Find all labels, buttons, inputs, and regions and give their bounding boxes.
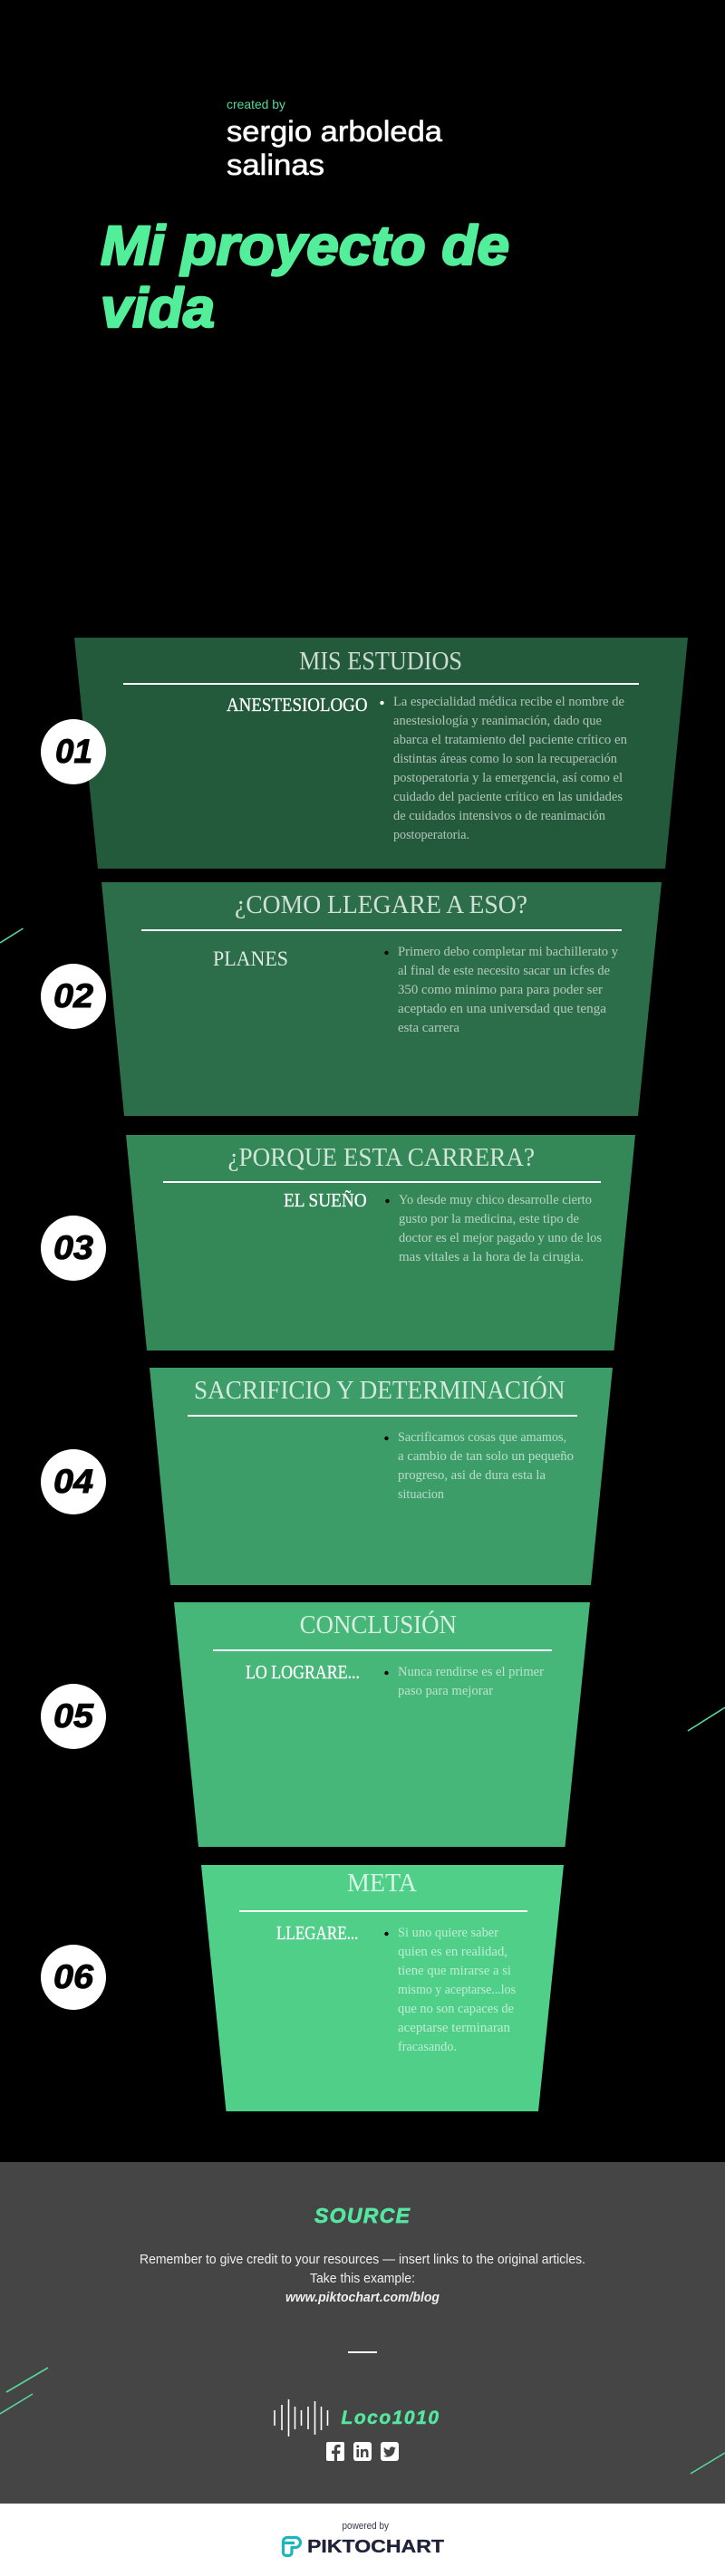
bullet (384, 1932, 389, 1936)
heading: conclusion: CONCLUSIÓN (300, 1611, 457, 1639)
number badge 05: 05 (53, 1697, 95, 1735)
body text: La especialidad médica recibe el nombre de (393, 695, 624, 709)
header: author credit: salinas (227, 149, 324, 181)
body text (399, 1193, 602, 1264)
title (101, 215, 509, 339)
number badge 04: 04 (53, 1463, 93, 1500)
powered by label: powered by (343, 2521, 389, 2532)
number badge 04 (41, 1449, 106, 1514)
subheading: planes: PLANES (213, 947, 288, 970)
heading: sacrificio y determinacion: SACRIFICIO Y DETERMINACIÓN (194, 1377, 566, 1405)
body text: mas vitales a la hora de la cirugia. (399, 1250, 584, 1264)
source text (140, 2252, 585, 2305)
heading: meta: META (347, 1870, 418, 1898)
body text: Si uno quiere saber (398, 1926, 498, 1940)
subheading: el sueno: EL SUEÑO (284, 1189, 367, 1211)
number badge 06 (41, 1945, 106, 2010)
number badge 05 (41, 1684, 106, 1749)
icon: facebook (326, 2442, 344, 2461)
body text: fracasando. (398, 2040, 457, 2054)
bullet (384, 1671, 389, 1675)
subheading: anestesiologo: ANESTESIOLOGO (227, 694, 368, 716)
heading: porque esta carrera: ¿PORQUE ESTA CARRERA? (228, 1144, 535, 1172)
number badge 06: 06 (53, 1958, 93, 1995)
number badge 02: 02 (53, 977, 93, 1014)
body text (398, 1665, 544, 1698)
number badge 01 (41, 719, 106, 784)
brand name: Loco1010 (341, 2408, 439, 2428)
heading: como llegare a eso: ¿COMO LLEGARE A ESO? (235, 891, 527, 919)
body text: Yo desde muy chico desarrolle cierto (399, 1193, 592, 1207)
body text: aceptado en una universdad que tenga (398, 1002, 607, 1016)
body text: a cambio de tan solo un pequeño (398, 1449, 574, 1464)
body text: postoperatoria. (393, 828, 469, 842)
decorative accent line: upper left (0, 928, 24, 943)
body text: Nunca rendirse es el primer (398, 1665, 544, 1679)
body text (393, 695, 628, 842)
bullet (384, 951, 389, 955)
panel: como llegare a eso (102, 882, 662, 1116)
source text: www.piktochart.com/blog (285, 2290, 440, 2305)
body text (398, 1926, 516, 2054)
number badge 01: 01 (55, 733, 92, 770)
decorative accent line: right (688, 1707, 725, 1731)
body text: distintas áreas como lo son la recuperación (393, 752, 618, 766)
icon: linkedin (353, 2442, 372, 2461)
body text (398, 1430, 574, 1502)
bullet (380, 701, 384, 705)
body text: tiene que mirarse a si (398, 1964, 511, 1978)
body text: Sacrificamos cosas que amamos, (398, 1430, 566, 1445)
source text: Take this example: (310, 2271, 415, 2286)
header: author credit (227, 97, 442, 181)
heading: source: SOURCE (314, 2204, 411, 2227)
source text: Remember to give credit to your resources — insert links to the original articles. (140, 2252, 585, 2267)
number badge 02 (41, 964, 106, 1029)
panel: source footer (0, 2162, 725, 2504)
icon: piktochart logo (283, 2538, 301, 2556)
body text: de cuidados intensivos o de reanimación (393, 809, 606, 823)
header: author credit: sergio arboleda (227, 115, 442, 148)
body text: quien es en realidad, (398, 1945, 508, 1959)
number badge 03 (41, 1216, 106, 1281)
panel: mis estudios (74, 638, 688, 869)
body text: situacion (398, 1487, 445, 1502)
body text: paso para mejorar (398, 1684, 493, 1698)
icon: sound wave logo (275, 2399, 328, 2437)
body text: 350 como minimo para para poder ser (398, 983, 603, 997)
body text: progreso, asi de dura esta la (398, 1468, 546, 1483)
body text: Primero debo completar mi bachillerato y (398, 945, 619, 959)
bullet (385, 1199, 390, 1203)
number badge 03: 03 (53, 1229, 93, 1266)
panel: porque esta carrera (126, 1135, 635, 1350)
heading: mis estudios: MIS ESTUDIOS (299, 648, 462, 676)
body text: gusto por la medicina, este tipo de (399, 1212, 579, 1226)
piktochart wordmark: PIKTOCHART (307, 2537, 444, 2557)
body text: al final de este necesito sacar un icfes de (398, 964, 610, 978)
body text: anestesiología y reanimación, dado que (393, 714, 602, 728)
decorative accent lines (0, 2368, 725, 2474)
body text (398, 945, 619, 1035)
body text: mismo y aceptarse...los (398, 1983, 516, 1997)
panel: sacrificio y determinacion (150, 1368, 613, 1585)
title: vida (101, 277, 215, 339)
title: Mi proyecto de (101, 215, 509, 276)
subheading: lo lograre: LO LOGRARE... (246, 1661, 360, 1683)
footer: powered by piktochart (0, 2504, 725, 2576)
body text: doctor es el mejor pagado y uno de los (399, 1231, 602, 1245)
body text: esta carrera (398, 1021, 460, 1035)
body text: abarca el tratamiento del paciente crítico en (393, 733, 628, 747)
body text: aceptarse terminaran (398, 2021, 511, 2035)
icon: twitter (381, 2442, 399, 2461)
body text: que no son capaces de (398, 2002, 514, 2016)
panel: meta (201, 1865, 564, 2111)
bullet (384, 1437, 389, 1440)
header: author credit: created by (227, 97, 285, 111)
body text: postoperatoria y la emergencia, así como el (393, 771, 623, 785)
body text: cuidado del paciente crítico en las unidades (393, 790, 623, 804)
subheading: llegare: LLEGARE... (276, 1922, 358, 1944)
panel: conclusion (174, 1602, 590, 1847)
